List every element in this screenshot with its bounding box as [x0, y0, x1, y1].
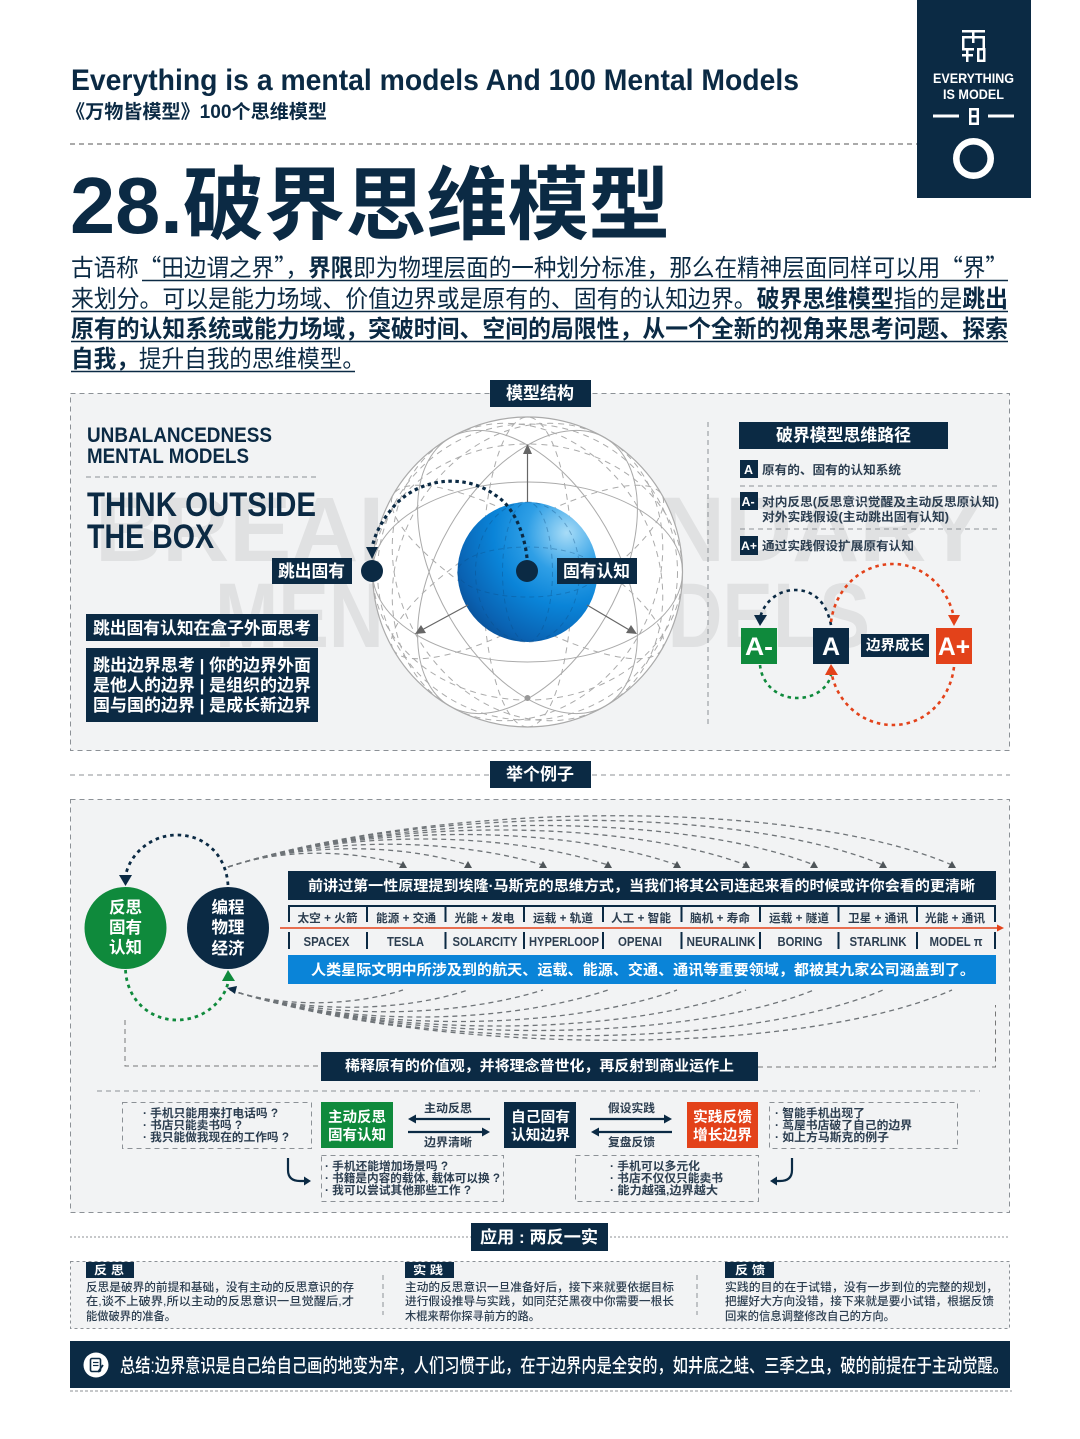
column: feedback: 回来的信息调整修改自己的方向。	[725, 1309, 895, 1323]
callout: boundaries: 国与国的边界 | 是成长新边界	[93, 695, 311, 715]
node: outer	[361, 560, 383, 582]
intro paragraph: 自我，提升自我的思维模型。	[71, 339, 365, 374]
list item A+: 通过实践假设扩展原有认知	[762, 538, 914, 553]
note box: smartphone: · 如上方马斯克的例子	[775, 1130, 890, 1144]
curved arrow right	[770, 1158, 792, 1186]
table: companies	[280, 906, 1004, 949]
chinese subheading: 《万物皆模型》100个思维模型	[66, 101, 327, 123]
node A+: A+	[938, 633, 970, 661]
logo text: IS MODEL	[943, 86, 1004, 102]
fan arcs top	[228, 816, 956, 868]
icon: note	[84, 1352, 108, 1378]
table: companies: 运载 + 隧道	[769, 911, 830, 925]
label: jump out	[272, 558, 352, 584]
banner: first principles: 前讲过第一性原理提到埃隆·马斯克的思维方式，当我们将其公司连起来看的时候或许你会看的更清晰	[308, 877, 976, 895]
table: companies: 能源 + 交通	[376, 911, 437, 925]
callout: think outside: 跳出固有认知在盒子外面思考	[93, 618, 311, 638]
arrows: reflection: 边界清晰	[424, 1135, 473, 1149]
table: companies: 太空 + 火箭	[298, 911, 358, 925]
column: reflect: 反思是破界的前提和基础，没有主动的反思意识的存	[86, 1280, 355, 1294]
header dashed rule	[70, 143, 917, 145]
table: companies: SPACEX	[304, 934, 350, 949]
label: inherent cognition: 固有认知	[563, 562, 630, 581]
column: reflect: 在,谈不上破界,所以主动的反思意识一旦觉醒后,才	[86, 1294, 354, 1308]
list heading: 破界模型思维路径	[776, 426, 911, 445]
column: feedback: 反 馈	[735, 1263, 766, 1277]
circle: programming physics economics	[187, 887, 269, 969]
table: companies: 运载 + 轨道	[533, 911, 594, 925]
list item A+: A+	[741, 539, 757, 553]
badge: model structure	[490, 380, 591, 407]
table: companies: 卫星 + 通讯	[848, 911, 909, 925]
thinking path list	[739, 422, 999, 555]
label: inherent cognition	[557, 558, 637, 584]
note box: questions: · 手机只能用来打电话吗 ?	[143, 1106, 278, 1120]
banner: dilute values: 稀释原有的价值观，并将理念普世化，再反射到商业运作上	[345, 1057, 734, 1075]
list item A+	[740, 536, 914, 555]
node A-: A-	[745, 633, 773, 661]
column: practice: 木棍来帮你探寻前方的路。	[405, 1309, 540, 1323]
badge: example: 举个例子	[506, 764, 574, 784]
heading: unbalancedness: MENTAL MODELS	[87, 445, 249, 468]
dotted jump arrow	[366, 481, 527, 559]
column: practice: 主动的反思意识一旦准备好后，接下来就要依据目标	[405, 1280, 675, 1294]
badge: application: 应用 : 两反一实	[480, 1227, 598, 1247]
sphere diagram	[272, 374, 716, 770]
table: companies: 光能 + 通讯	[925, 911, 986, 925]
logo divider	[933, 108, 1014, 125]
heading: think outside the box	[87, 486, 316, 556]
logo block	[917, 0, 1031, 198]
wireframe	[339, 374, 716, 770]
loop arrow: top	[119, 835, 228, 886]
table: companies: HYPERLOOP	[529, 934, 599, 949]
logo text	[933, 70, 1014, 102]
banner: first principles	[288, 871, 996, 900]
banner: nine companies	[288, 955, 996, 984]
connector dashed	[125, 1005, 996, 1067]
heading: think outside the box: THE BOX	[87, 518, 214, 556]
box: practice feedback	[687, 1102, 758, 1148]
note box: diversification	[576, 1156, 758, 1202]
icon: logo glyph	[962, 30, 986, 62]
watermark text: BREAK BOUNDARY	[95, 479, 985, 581]
table: companies: 脑机 + 寿命	[690, 911, 751, 925]
badge: example	[490, 761, 591, 788]
note box: more scenarios: · 我可以尝试其他那些工作 ?	[325, 1183, 471, 1197]
note box: smartphone: · 茑屋书店破了自己的边界	[775, 1118, 913, 1132]
label: boundary growth: 边界成长	[866, 637, 924, 653]
sphere wire overlay	[458, 502, 598, 642]
note box: questions: · 我只能做我现在的工作吗 ?	[143, 1130, 289, 1144]
note box: diversification: · 能力越强,边界越大	[610, 1183, 719, 1197]
label: boundary growth	[861, 634, 929, 657]
callout: boundaries	[86, 648, 318, 722]
english heading: Everything is a mental models And 100 Mental Models	[71, 64, 799, 97]
watermark text	[95, 479, 985, 667]
table: companies: NEURALINK	[686, 934, 756, 949]
table: companies: BORING	[778, 934, 822, 949]
callout: boundaries: 跳出边界思考 | 你的边界外面	[93, 656, 311, 675]
box: active reflection	[321, 1102, 393, 1148]
note box: smartphone	[770, 1102, 958, 1148]
box: own boundary: 自己固有	[511, 1108, 570, 1126]
column: feedback: 实践的目的在于试错，没有一步到位的完整的规划，	[725, 1280, 998, 1294]
logo text: EVERYTHING	[933, 70, 1014, 86]
circle: reflect: 认知	[109, 938, 142, 957]
list item A-: 对外实践假设(主动跳出固有认知)	[762, 509, 949, 524]
circle: reflect	[84, 887, 166, 969]
badge: application	[471, 1223, 608, 1251]
table: companies: 人工 + 智能	[611, 911, 672, 925]
table: companies: 光能 + 发电	[454, 911, 515, 925]
panel: application	[70, 1262, 1010, 1328]
note box: more scenarios: · 手机还能增加场景吗 ?	[325, 1159, 448, 1173]
column: practice: 进行假设推导与实践，如同茫茫黑夜中你需要一根长	[405, 1294, 675, 1308]
boundary growth loop diagram	[741, 564, 972, 725]
box: own boundary	[504, 1102, 576, 1148]
table: companies: TESLA	[387, 934, 425, 949]
arrows: reflection	[408, 1101, 490, 1149]
logo ring	[956, 141, 991, 176]
list item A	[740, 460, 901, 478]
note box: questions	[122, 1102, 312, 1148]
summary bar	[70, 1341, 1010, 1388]
list item A-	[740, 492, 999, 524]
circle: programming physics economics: 编程	[212, 897, 244, 917]
table: companies: OPENAI	[618, 934, 662, 949]
column: practice	[405, 1262, 675, 1323]
note box: questions: · 书店只能卖书吗 ?	[143, 1118, 242, 1132]
intro paragraph: 古语称“田边谓之界”，界限即为物理层面的一种划分标准，那么在精神层面同样可以用“界”	[71, 248, 1008, 283]
arrows outward	[415, 444, 637, 701]
list item A-: A-	[742, 495, 755, 509]
node: inner	[516, 560, 538, 582]
note box: diversification: · 书店不仅仅只能卖书	[610, 1171, 724, 1185]
box: active reflection: 固有认知	[328, 1127, 386, 1144]
column: practice: 实 践	[413, 1263, 444, 1277]
arrows: practice	[590, 1101, 672, 1149]
intro paragraph: 原有的认知系统或能力场域，突破时间、空间的局限性，从一个全新的视角来思考问题、探索	[71, 309, 1008, 344]
circle: reflect: 反思	[109, 898, 142, 917]
column: reflect: 能做破界的准备。	[86, 1309, 176, 1323]
arrows: reflection: 主动反思	[424, 1101, 473, 1115]
watermark text: MENTAL MODELS	[215, 565, 870, 667]
note box: more scenarios	[322, 1156, 504, 1202]
note box: more scenarios: · 书籍是内容的载体, 载体可以换 ?	[325, 1171, 500, 1185]
banner: nine companies: 人类星际文明中所涉及到的航天、运载、能源、交通、通讯等重要领域，都被其九家公司涵盖到了。	[311, 961, 975, 979]
inner sphere	[458, 502, 598, 642]
panel: example	[70, 800, 1010, 1212]
list item A-: 对内反思(反思意识觉醒及主动反思原认知)	[762, 494, 999, 509]
intro paragraph: 来划分。可以是能力场域、价值边界或是原有的、固有的认知边界。破界思维模型指的是跳出	[71, 279, 1008, 314]
callout: think outside	[86, 614, 318, 641]
table: companies: MODEL π	[930, 934, 983, 949]
badge: model structure: 模型结构	[506, 383, 574, 403]
arrows: practice: 复盘反馈	[608, 1135, 656, 1149]
circle: programming physics economics: 物理	[212, 918, 245, 937]
box: practice feedback: 增长边界	[693, 1126, 753, 1144]
loop arrow: bottom	[126, 970, 235, 1020]
intro paragraph	[71, 248, 1008, 374]
title: 28.破界思维模型	[70, 161, 670, 250]
column: feedback: 把握好大方向没错，接下来就是要小试错，根据反馈	[725, 1294, 995, 1308]
box: active reflection: 主动反思	[328, 1108, 386, 1126]
note box: smartphone: · 智能手机出现了	[775, 1106, 865, 1120]
curved arrow left	[288, 1158, 311, 1186]
heading: unbalancedness: UNBALANCEDNESS	[87, 424, 272, 447]
heading: unbalancedness	[87, 424, 272, 468]
panel: model structure	[70, 374, 1010, 770]
column: feedback	[725, 1262, 998, 1323]
node A-	[741, 628, 777, 664]
node A: A	[822, 633, 840, 661]
arrows: practice: 假设实践	[608, 1101, 656, 1115]
heading: think outside the box: THINK OUTSIDE	[87, 486, 316, 524]
table: companies: SOLARCITY	[452, 934, 518, 949]
table: companies: STARLINK	[850, 934, 907, 949]
banner: dilute values	[321, 1052, 758, 1081]
node A	[813, 628, 849, 664]
timeline arrow	[280, 924, 1004, 932]
box: practice feedback: 实践反馈	[693, 1108, 753, 1126]
list item A: 原有的、固有的认知系统	[762, 462, 901, 477]
circle: reflect: 固有	[109, 918, 142, 937]
circle: programming physics economics: 经济	[212, 938, 245, 958]
list item A: A	[744, 463, 753, 477]
label: jump out: 跳出固有	[278, 562, 345, 581]
callout: boundaries: 是他人的边界 | 是组织的边界	[93, 676, 311, 695]
column: reflect	[86, 1262, 355, 1323]
column: reflect: 反 思	[94, 1263, 125, 1277]
note box: diversification: · 手机可以多元化	[610, 1159, 701, 1173]
box: own boundary: 认知边界	[511, 1127, 571, 1144]
list heading	[739, 422, 948, 449]
fan arcs bottom	[227, 986, 952, 1040]
